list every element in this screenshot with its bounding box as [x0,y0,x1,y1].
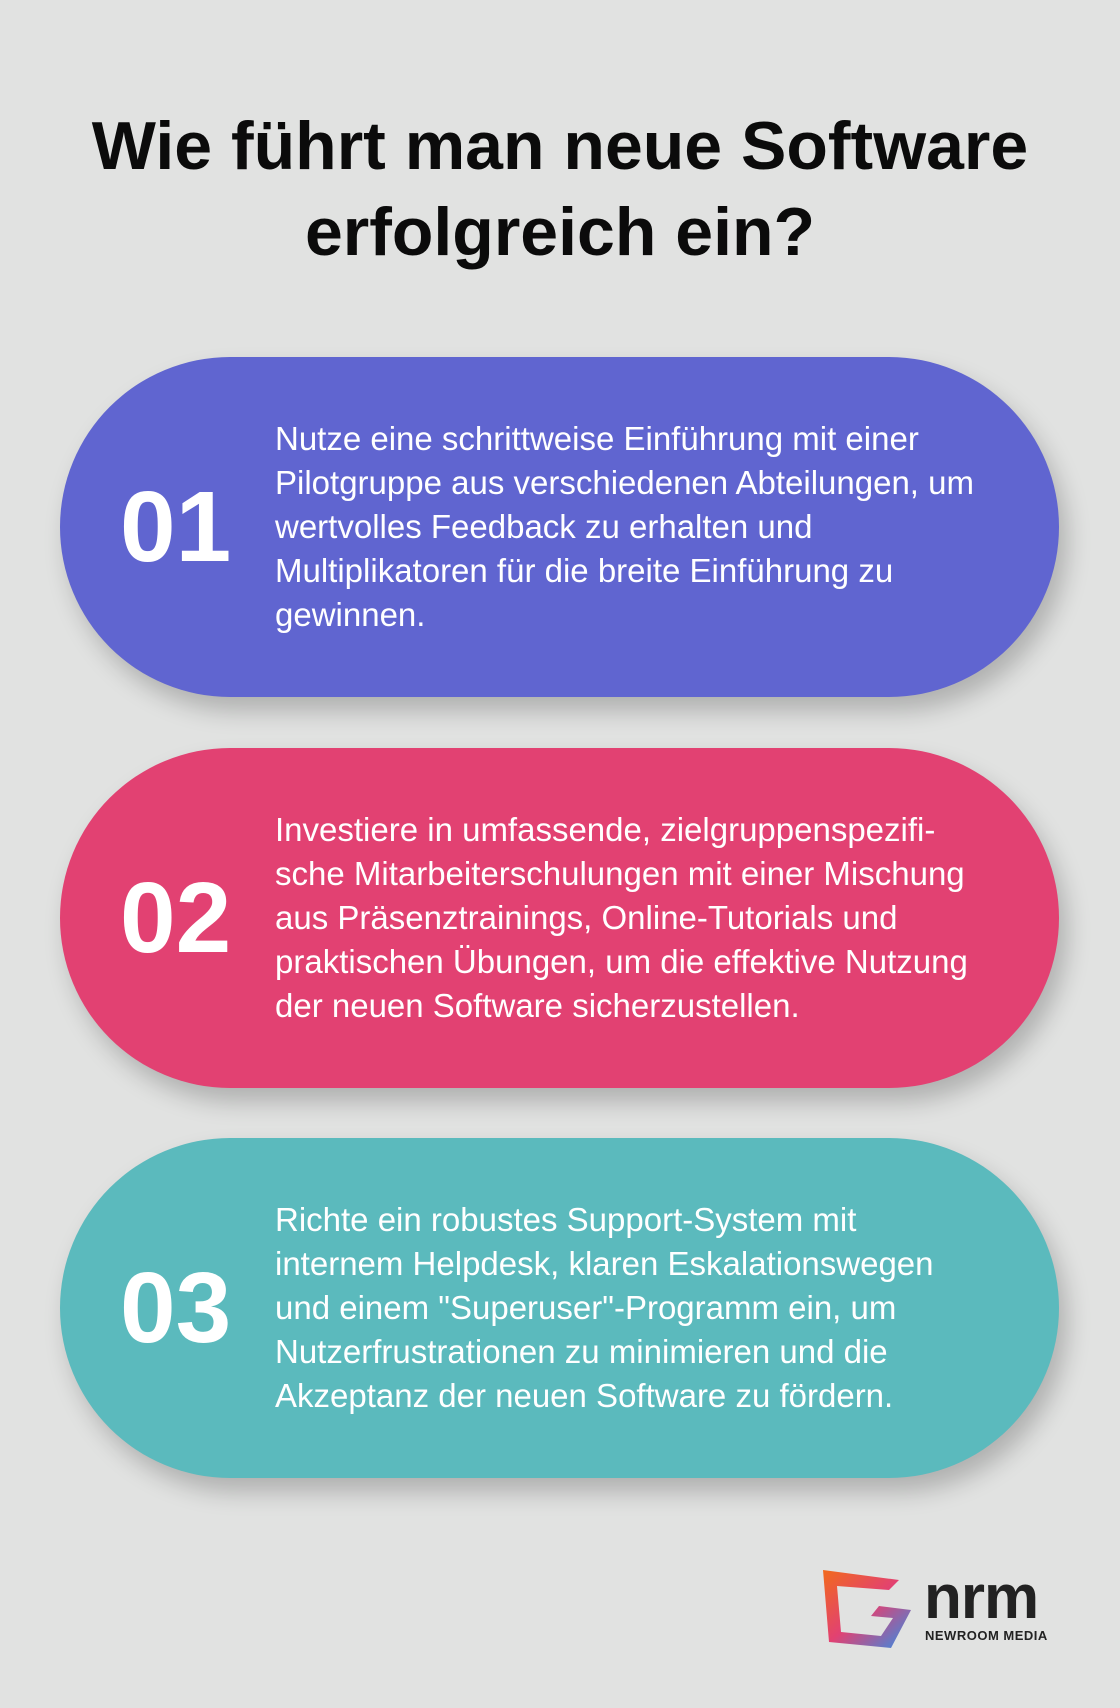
title: erfolgreich ein? [305,194,815,270]
text step 3: internem Helpdesk, klaren Eskalationswegen [275,1245,934,1282]
text step 2: praktischen Übungen, um die effektive Nutzung [275,943,968,980]
text step 2: sche Mitarbeiterschulungen mit einer Mischung [275,855,965,892]
text step 3: und einem "Superuser"-Programm ein, um [275,1289,896,1326]
text step 2 [275,811,968,1024]
logo text: nrm [924,1563,1038,1632]
logo: NEWROOM MEDIA [925,1628,1048,1643]
text step 3: Richte ein robustes Support-System mit [275,1201,856,1238]
panel: step 3 [60,1138,1059,1478]
text step 1: wertvolles Feedback zu erhalten und [275,508,812,545]
title [92,108,1028,270]
text step 1: gewinnen. [275,596,425,633]
text step 3 [275,1201,934,1414]
number 03: 03 [120,1252,231,1364]
icon: logo mark [823,1570,911,1648]
panel: step 1 [60,357,1059,697]
title: Wie führt man neue Software [92,108,1028,184]
text step 2: Investiere in umfassende, zielgruppenspezifi- [275,811,935,848]
text step 3: Nutzerfrustrationen zu minimieren und die [275,1333,888,1370]
text step 1 [275,420,974,633]
text step 1: Nutze eine schrittweise Einführung mit einer [275,420,919,457]
panel: step 2 [60,748,1059,1088]
number 01: 01 [120,471,231,583]
logo [823,1563,1048,1648]
text step 3: Akzeptanz der neuen Software zu fördern. [275,1377,893,1414]
text step 2: der neuen Software sicherzustellen. [275,987,800,1024]
text step 1: Multiplikatoren für die breite Einführung zu [275,552,893,589]
text step 2: aus Präsenztrainings, Online-Tutorials und [275,899,897,936]
text step 1: Pilotgruppe aus verschiedenen Abteilungen, um [275,464,974,501]
number 02: 02 [120,862,231,974]
